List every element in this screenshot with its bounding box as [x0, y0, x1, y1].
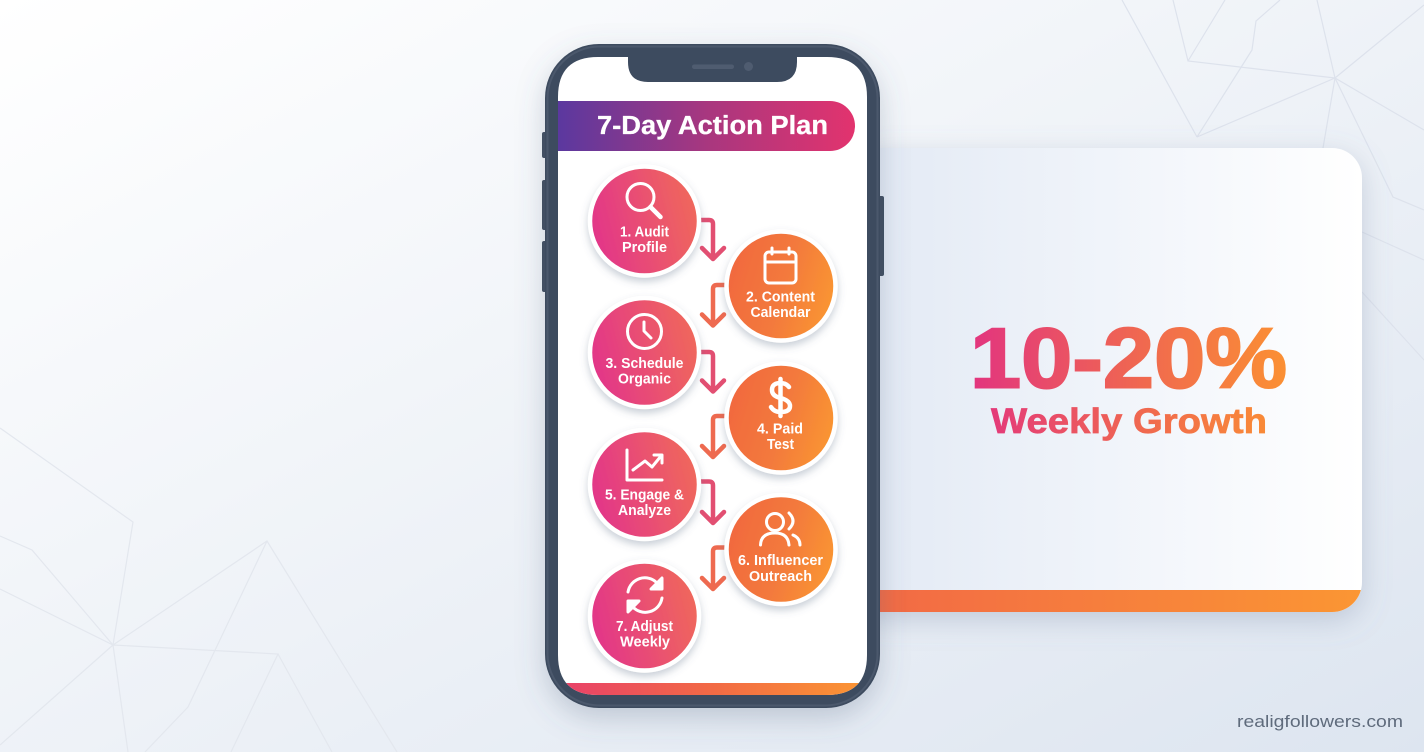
screen bottom bar [558, 683, 867, 695]
label: 3. Schedule [606, 356, 684, 372]
step 1: Audit Profile [590, 166, 699, 276]
icon: dollar sign [771, 379, 790, 416]
label: Organic [618, 372, 671, 388]
icon: clock [628, 314, 662, 348]
step 7: Adjust Weekly [590, 562, 699, 670]
card bottom accent bar [850, 590, 1362, 612]
step 4: Paid Test [726, 364, 836, 472]
arrow: step 3 to 4 [700, 352, 724, 392]
label: Calendar [750, 305, 811, 321]
phone screen [558, 57, 867, 695]
phone body [545, 44, 880, 708]
background network lines top right [1122, 0, 1424, 360]
website footer: realigfollowers.com [1237, 712, 1403, 731]
statistic: 10-20%: 10-20% [970, 312, 1287, 406]
arrow: step 1 to 2 [700, 220, 724, 259]
heading banner: 7-Day Action Plan [558, 101, 855, 151]
label [606, 356, 684, 388]
phone speaker and camera [692, 62, 753, 71]
label: 6. Influencer [738, 553, 823, 569]
heading banner: 7-Day Action Plan: 7-Day Action Plan [597, 112, 828, 140]
icon: magnifying glass [627, 184, 660, 217]
label [620, 224, 669, 256]
label: Profile [622, 240, 667, 256]
step 2: Content Calendar [726, 232, 836, 340]
arrow: step 5 to 6 [700, 482, 724, 523]
label: Outreach [749, 569, 812, 585]
step 6: Influencer Outreach [726, 495, 836, 604]
statistic label: Weekly Growth: Weekly Growth [991, 402, 1267, 441]
label: 4. Paid [757, 422, 803, 438]
label: 5. Engage & [605, 488, 684, 504]
arrow: step 4 to 5 [702, 416, 726, 457]
label: 2. Content [746, 290, 815, 306]
background network lines bottom left [0, 428, 397, 752]
icon: growth chart [627, 450, 662, 480]
step 3: Schedule Organic [590, 298, 699, 407]
icon: calendar [765, 248, 796, 283]
label [757, 422, 803, 453]
label [738, 553, 823, 585]
panel: growth stat card [850, 148, 1362, 612]
label [605, 488, 684, 519]
arrow: step 6 to 7 [702, 548, 726, 589]
label [616, 619, 673, 650]
label: 1. Audit [620, 224, 669, 240]
phone [542, 44, 884, 708]
icon: people [760, 513, 800, 545]
label: 7. Adjust [616, 619, 673, 635]
label: Analyze [618, 503, 671, 519]
step 5: Engage & Analyze [590, 430, 699, 539]
arrow: step 2 to 3 [702, 285, 726, 326]
label: Test [767, 437, 794, 453]
phone side buttons [542, 132, 884, 292]
label: Weekly [620, 634, 670, 650]
label [746, 290, 815, 321]
icon: refresh arrows [628, 578, 662, 612]
